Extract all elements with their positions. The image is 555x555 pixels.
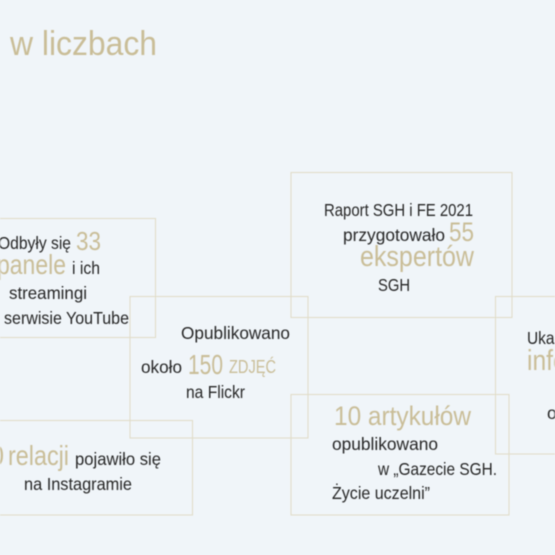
panel: Flickr photos <box>130 296 308 438</box>
panel: Instagram stories: pojawiło się <box>75 449 161 469</box>
panel: panels and streaming: Odbyły się <box>0 233 71 253</box>
panel: panels and streaming: i ich <box>72 258 100 278</box>
panel: Instagram stories: na Instagramie <box>24 474 132 494</box>
panel: Flickr photos: ZDJĘĆ <box>229 356 276 377</box>
panel: panels and streaming <box>0 218 156 338</box>
panel: infographics <box>496 296 555 454</box>
panel: SGH and FE report <box>291 172 512 318</box>
panel: Instagram stories: relacji <box>8 440 69 471</box>
panel: Instagram stories <box>0 420 192 515</box>
panel: newspaper articles: opublikowano <box>332 434 438 454</box>
panel: SGH and FE report: 55 <box>449 217 474 247</box>
panel: SGH and FE report: przygotowało <box>343 225 445 245</box>
panel: panels and streaming: 33 <box>76 226 101 256</box>
panel: SGH and FE report: SGH <box>378 275 410 295</box>
panel: newspaper articles: 10 artykułów <box>334 401 471 431</box>
panel: panels and streaming: streamingi <box>9 283 87 303</box>
panel: Flickr photos: 150 <box>188 349 223 380</box>
panel: Flickr photos: na Flickr <box>186 382 245 402</box>
panel: newspaper articles: w „Gazecie SGH. <box>377 459 497 479</box>
panel: SGH and FE report: ekspertów <box>360 241 475 273</box>
panel: newspaper articles: Życie uczelni” <box>332 483 430 503</box>
panel: Flickr photos: około <box>141 357 182 377</box>
panel: Flickr photos: Opublikowano <box>181 323 290 343</box>
panel: SGH and FE report: Raport SGH i FE 2021 <box>324 200 473 220</box>
title: w liczbach <box>9 25 157 63</box>
panel: newspaper articles <box>291 394 509 515</box>
